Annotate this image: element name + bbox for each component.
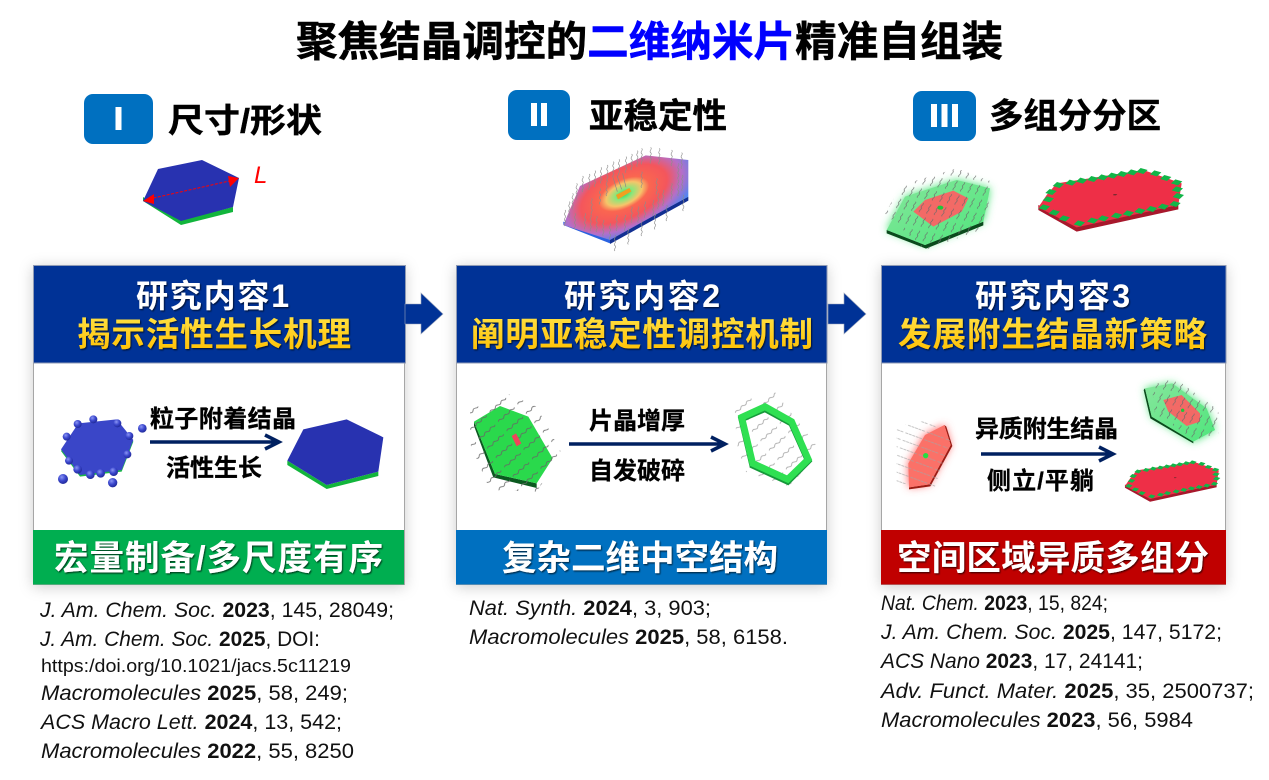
arrow — [981, 447, 1113, 461]
heading text I: 尺寸/形状 — [168, 102, 322, 139]
illustration: hollow ring — [733, 390, 820, 487]
arrow — [569, 437, 725, 451]
icon: hexagon with length L: L — [254, 162, 267, 189]
panel header: 发展附生结晶新策略 — [898, 317, 1208, 354]
references: panel 3: Macromolecules 2023, 56, 5984 — [881, 708, 1193, 732]
panel frame — [882, 266, 1226, 584]
illustration: flat red plate with green tiles — [1125, 460, 1220, 502]
heading text II: 亚稳定性 — [589, 98, 727, 136]
icon: green hexagon with red core — [885, 168, 992, 250]
illustration: tilted green and red hexagon — [1144, 378, 1218, 443]
references: panel 3: ACS Nano 2023, 17, 24141; — [879, 649, 1143, 673]
illustration: thick green plate — [470, 393, 562, 492]
illustration: side-on red seed — [897, 420, 952, 489]
icon: red plate with green edge tiles — [1038, 168, 1184, 232]
title: 聚焦结晶调控的二维纳米片精准自组装 — [296, 18, 1003, 65]
illustration: particle attachment to hexagon — [58, 415, 383, 489]
heading text III: 多组分分区 — [989, 98, 1161, 136]
references: panel 1: J. Am. Chem. Soc. 2023, 145, 28049; — [39, 598, 394, 622]
panel frame — [34, 266, 404, 584]
panel 1: active growth — [33, 266, 406, 584]
panel footer: 宏量制备/多尺度有序 — [54, 540, 383, 578]
references: panel 3: Adv. Funct. Mater. 2025, 35, 2500737; — [879, 679, 1254, 703]
references: panel 2 — [469, 596, 788, 649]
badge I — [84, 94, 153, 144]
badge III — [913, 91, 976, 141]
references: panel 1: https:/doi.org/10.1021/jacs.5c11219 — [41, 655, 351, 676]
panel header: 研究内容3 — [975, 278, 1130, 314]
references: panel 1: Macromolecules 2025, 58, 249; — [41, 681, 348, 705]
icon: hexagon with length L — [143, 160, 267, 225]
panel footer — [33, 530, 404, 584]
label: standing and lying: 侧立/平躺 — [987, 468, 1094, 495]
panel 3: epitaxial strategy — [881, 266, 1226, 584]
icon: metastable heat-map hexagon — [563, 147, 688, 251]
panel 2: metastability — [456, 266, 827, 584]
label: spontaneous fragmentation: 自发破碎 — [589, 458, 685, 485]
references: panel 3: Nat. Chem. 2023, 15, 824; — [881, 591, 1108, 615]
heading: III multi-component zoning — [913, 91, 1161, 141]
panel footer — [881, 530, 1226, 584]
panel footer — [456, 530, 827, 584]
references: panel 3: J. Am. Chem. Soc. 2025, 147, 5172; — [880, 620, 1222, 644]
panel header — [882, 266, 1226, 363]
references: panel 1 — [39, 598, 394, 763]
arrow: panel 1 to panel 2 — [405, 293, 443, 334]
panel footer: 空间区域异质多组分 — [897, 540, 1209, 578]
arrow: panel 2 to panel 3 — [828, 293, 866, 334]
label: heteroepitaxial crystallization: 异质附生结晶 — [975, 416, 1118, 443]
label: lamella thickening: 片晶增厚 — [589, 408, 685, 435]
references: panel 2: Nat. Synth. 2024, 3, 903; — [469, 596, 711, 620]
badge II — [508, 90, 570, 140]
panel footer: 复杂二维中空结构 — [502, 540, 778, 578]
references: panel 2: Macromolecules 2025, 58, 6158. — [469, 625, 788, 649]
panel header — [34, 266, 406, 363]
panel frame — [456, 266, 826, 584]
references: panel 1: ACS Macro Lett. 2024, 13, 542; — [39, 710, 342, 734]
heading: I size and shape — [84, 94, 322, 144]
arrow — [150, 435, 279, 449]
panel header: 揭示活性生长机理 — [77, 317, 351, 354]
panel header: 阐明亚稳定性调控机制 — [471, 317, 813, 354]
references: panel 1: Macromolecules 2022, 55, 8250 — [41, 739, 354, 763]
heading: II metastability — [508, 90, 727, 140]
panel header — [456, 266, 827, 363]
references: panel 3 — [879, 591, 1254, 732]
panel header: 研究内容2 — [564, 278, 720, 314]
panel header: 研究内容1 — [136, 278, 289, 314]
label: particle attachment: 粒子附着结晶 — [150, 406, 296, 433]
references: panel 1: J. Am. Chem. Soc. 2025, DOI: — [39, 627, 320, 651]
label: active growth: 活性生长 — [166, 455, 262, 482]
